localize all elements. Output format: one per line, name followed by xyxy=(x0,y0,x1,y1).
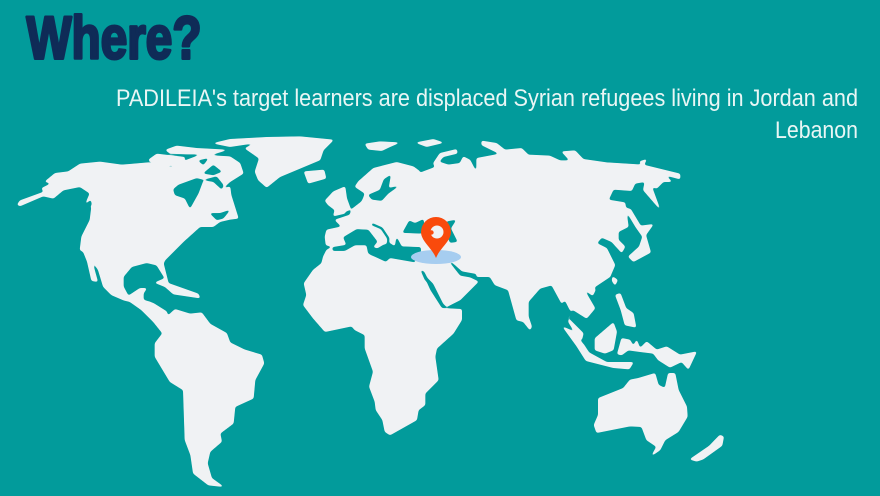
description text: Lebanon xyxy=(775,117,858,144)
Greenland xyxy=(213,137,333,187)
Malay Peninsula xyxy=(568,309,583,340)
Australia xyxy=(594,373,687,456)
Hainan xyxy=(589,289,596,296)
Europe and western Asia xyxy=(304,139,507,285)
Mediterranean Sea xyxy=(333,229,421,262)
Red Sea xyxy=(421,270,431,285)
Africa and Arabia xyxy=(303,245,478,435)
Franz Josef Land xyxy=(416,139,443,147)
Taiwan xyxy=(612,277,618,285)
South America xyxy=(130,302,264,487)
Novaya Zemlya xyxy=(433,149,457,167)
Black Sea xyxy=(403,219,425,233)
marker shadow xyxy=(411,250,461,264)
Great Britain xyxy=(325,187,351,216)
location marker xyxy=(411,217,461,264)
Baltic Sea xyxy=(368,175,399,201)
Kuril island xyxy=(639,159,647,166)
Svalbard xyxy=(365,142,399,151)
Sulawesi and New Guinea xyxy=(617,338,697,369)
Southeast Asia and Oceania xyxy=(563,289,724,461)
Hudson Bay xyxy=(173,178,203,208)
New Zealand xyxy=(690,435,724,461)
Iceland xyxy=(304,170,326,183)
world map xyxy=(0,125,760,496)
Caspian Sea xyxy=(447,220,457,243)
Japan xyxy=(624,207,653,262)
map pin xyxy=(421,217,451,258)
Sumatra and Java xyxy=(563,327,633,369)
East Asia xyxy=(477,141,680,330)
Philippines xyxy=(615,293,636,327)
title: Where? xyxy=(26,4,202,72)
Borneo xyxy=(595,323,617,353)
pin hole xyxy=(429,226,444,238)
North and Central America xyxy=(17,146,243,322)
description text xyxy=(116,85,858,144)
